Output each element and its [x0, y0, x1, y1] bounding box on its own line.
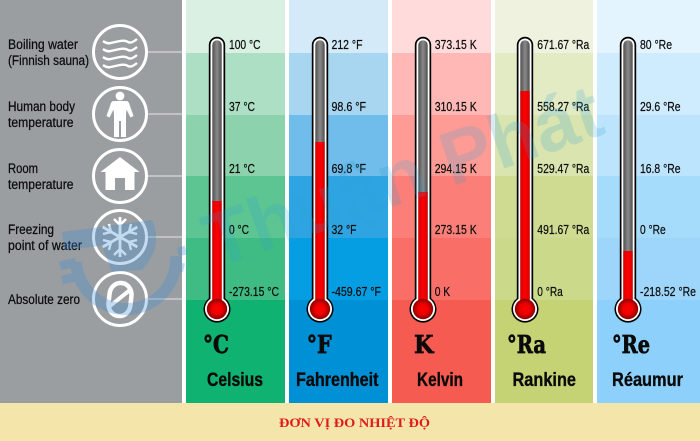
text: Rankine scale values: 491.67 °Ra	[537, 222, 590, 237]
text: unit symbols: °F	[307, 330, 332, 359]
text: Réaumur scale values: 29.6 °Re	[640, 99, 680, 114]
text: reference point labels: Absolute zero	[8, 292, 80, 307]
text: unit symbols: K	[414, 330, 435, 359]
panel: Kelvin column	[392, 0, 491, 403]
text: unit symbols: °C	[203, 330, 229, 359]
text: reference point labels: Boiling water	[8, 37, 78, 52]
text: scale names: Rankine	[512, 370, 576, 391]
text: scale names: Fahrenheit	[296, 370, 379, 391]
text: Celsius scale values: 0 °C	[229, 222, 249, 237]
text: unit symbols	[203, 330, 650, 359]
text: Réaumur scale values	[640, 37, 696, 299]
text: Fahrenheit scale values: 69.8 °F	[332, 161, 366, 176]
text: Kelvin scale values: 273.15 K	[435, 222, 477, 237]
text: Rankine scale values: 671.67 °Ra	[537, 37, 590, 52]
text: reference point labels: temperature	[8, 115, 74, 130]
text: Fahrenheit scale values: 98.6 °F	[332, 99, 366, 114]
thermometer: Fahrenheit	[306, 37, 334, 323]
text: unit symbols: °Ra	[507, 330, 546, 359]
panel: Rankine column	[495, 0, 593, 403]
text: Fahrenheit scale values: -459.67 °F	[332, 284, 381, 299]
footer title: ĐƠN VỊ ĐO NHIỆT ĐỘ	[279, 415, 430, 430]
text: Fahrenheit scale values: 212 °F	[332, 37, 363, 52]
text: reference point labels: Freezing	[8, 222, 54, 237]
thermometer: Rankine	[512, 37, 538, 323]
text: Celsius scale values	[229, 37, 279, 299]
watermark: brand text: Thuận Phát	[193, 69, 613, 284]
text: reference point labels: (Finnish sauna)	[8, 53, 89, 68]
text: scale names	[207, 370, 684, 391]
text: Celsius scale values: 100 °C	[229, 37, 260, 52]
panel: Fahrenheit column	[289, 0, 388, 403]
text: Réaumur scale values: 16.8 °Re	[640, 161, 680, 176]
text: Kelvin scale values: 310.15 K	[435, 99, 477, 114]
icon: boiling water waves	[94, 26, 146, 78]
text: Kelvin scale values: 294.15 K	[435, 161, 477, 176]
text: Fahrenheit scale values: 32 °F	[332, 222, 357, 237]
text: Kelvin scale values: 373.15 K	[435, 37, 477, 52]
text: Celsius scale values: 37 °C	[229, 99, 255, 114]
text: unit symbols: °Re	[612, 330, 650, 359]
connector lines from icons to columns	[147, 52, 182, 299]
thermometer: Réaumur	[614, 37, 642, 323]
text: Rankine scale values: 558.27 °Ra	[537, 99, 590, 114]
text: reference point labels: point of water	[8, 238, 82, 253]
text: Réaumur scale values: 0 °Re	[640, 222, 666, 237]
thermometer: Kelvin	[410, 37, 436, 323]
text: reference point labels: Human body	[8, 99, 75, 114]
text: reference point labels: temperature	[8, 177, 74, 192]
icon: absolute zero	[94, 272, 146, 326]
text: scale names: Celsius	[207, 370, 263, 391]
icon: house	[94, 150, 146, 202]
text: Kelvin scale values: 0 K	[435, 284, 450, 299]
text: Rankine scale values: 0 °Ra	[537, 284, 563, 299]
thermometer: Celsius	[204, 37, 230, 323]
text: Réaumur scale values: 80 °Re	[640, 37, 672, 52]
text: reference point labels	[8, 37, 89, 307]
icon: snowflake	[94, 210, 146, 264]
text: Rankine scale values: 529.47 °Ra	[537, 161, 590, 176]
text: Rankine scale values	[537, 37, 590, 299]
panel: left gray background	[0, 0, 182, 403]
text: Kelvin scale values	[435, 37, 477, 299]
text: scale names: Réaumur	[612, 370, 684, 391]
text: Fahrenheit scale values	[332, 37, 381, 299]
text: scale names: Kelvin	[417, 370, 463, 391]
watermark: gear logo	[60, 220, 186, 309]
footer banner	[0, 403, 700, 441]
icon: human figure	[94, 88, 146, 140]
panel: Celsius column	[186, 0, 285, 403]
text: Celsius scale values: 21 °C	[229, 161, 255, 176]
panel: Réaumur column	[597, 0, 700, 403]
text: Celsius scale values: -273.15 °C	[229, 284, 279, 299]
text: reference point labels: Room	[8, 161, 38, 176]
